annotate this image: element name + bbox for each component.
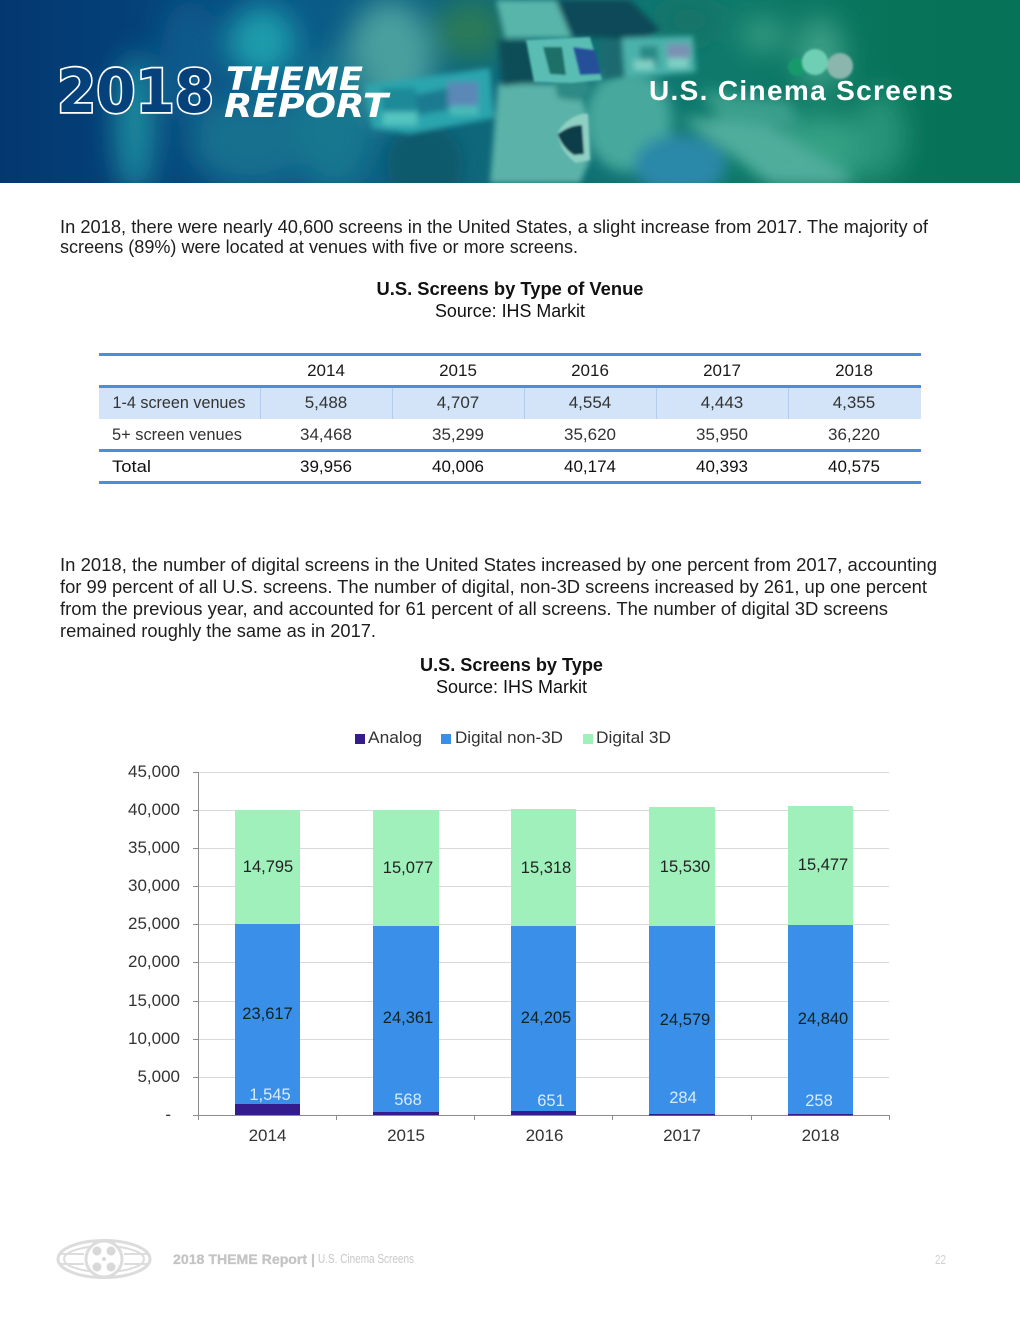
y axis: 20,000 <box>128 952 180 971</box>
hand <box>680 118 850 183</box>
bokeh lights <box>788 49 853 79</box>
bar 2015: 24,361 <box>383 1009 433 1027</box>
y axis: 5,000 <box>137 1067 180 1086</box>
y axis: 45,000 <box>128 762 180 781</box>
bar 2016: 15,318 <box>521 859 571 877</box>
bar 2018: 258 <box>805 1092 833 1110</box>
logo: 2018 THEME REPORT <box>57 57 391 127</box>
legend: Digital non-3D <box>455 728 563 747</box>
header row: 2014 <box>307 361 345 380</box>
banner title: U.S. Cinema Screens <box>649 75 953 106</box>
table heading: Source: IHS Markit <box>435 301 585 321</box>
y axis <box>128 762 180 1124</box>
hair <box>556 0 660 41</box>
chart heading <box>420 655 603 697</box>
x axis labels <box>249 1126 839 1145</box>
bar 2018 <box>788 806 853 1116</box>
y axis: 25,000 <box>128 914 180 933</box>
header row: 2016 <box>571 361 609 380</box>
bar 2016: 651 <box>537 1092 565 1110</box>
bar 2015: 568 <box>394 1091 422 1109</box>
bar 2018: 15,477 <box>798 856 848 874</box>
header banner <box>0 0 1020 183</box>
legend: Digital 3D <box>596 728 671 747</box>
row: 5+ screen venues <box>112 425 880 444</box>
intro paragraph <box>60 217 929 257</box>
foreground skin <box>496 0 572 38</box>
bar 2015: 15,077 <box>383 859 433 877</box>
x axis labels: 2015 <box>387 1126 425 1145</box>
row: 5+ screen venues: 34,468 <box>300 425 352 444</box>
bar 2017: 24,579 <box>660 1011 710 1029</box>
open mouth <box>558 114 590 163</box>
header row <box>307 361 873 380</box>
table heading: U.S. Screens by Type of Venue <box>376 279 644 299</box>
digital screens paragraph: for 99 percent of all U.S. screens. The number of digital, non-3D screens increased by 261, up one percent <box>60 577 927 597</box>
foreground face <box>526 37 602 163</box>
y axis: - <box>165 1105 171 1124</box>
intro paragraph: screens (89%) were located at venues with five or more screens. <box>60 237 578 257</box>
row: 1-4 screen venues <box>112 393 875 412</box>
logo: 2018 THEME REPORT: REPORT <box>224 86 391 125</box>
row: 1-4 screen venues: 5,488 <box>305 393 347 412</box>
y axis: 40,000 <box>128 800 180 819</box>
row: 5+ screen venues: 35,950 <box>696 425 748 444</box>
legend: Analog <box>368 728 422 747</box>
logo: 2018 THEME REPORT: THEME <box>226 60 363 98</box>
row: 5+ screen venues: 35,299 <box>432 425 484 444</box>
row: total: Total <box>112 457 151 476</box>
row: 5+ screen venues: 5+ screen venues <box>112 426 242 444</box>
bar 2015 <box>373 810 439 1115</box>
row: 1-4 screen venues: 4,707 <box>437 393 479 412</box>
row: 1-4 screen venues: 1-4 screen venues <box>112 394 246 412</box>
logo: 2018 THEME REPORT: 2018 <box>57 57 214 127</box>
stacked bar chart <box>128 728 890 1145</box>
row: total: 39,956 <box>300 457 352 476</box>
photo: blurred 3D glasses audience <box>115 0 906 207</box>
header row: 2015 <box>439 361 477 380</box>
row: total: 40,575 <box>828 457 880 476</box>
row: 5+ screen venues: 36,220 <box>828 425 880 444</box>
chart heading: Source: IHS Markit <box>436 677 587 697</box>
bar 2014 <box>235 810 300 1115</box>
row: 1-4 screen venues: 4,443 <box>701 393 743 412</box>
row: 5+ screen venues: 35,620 <box>564 425 616 444</box>
y axis: 10,000 <box>128 1029 180 1048</box>
x axis labels: 2014 <box>249 1126 286 1145</box>
second glasses <box>600 38 628 80</box>
row: total: 40,006 <box>432 457 484 476</box>
far glasses <box>365 68 494 134</box>
bar 2014: 14,795 <box>243 858 293 876</box>
table heading <box>376 279 644 321</box>
row: 1-4 screen venues: 4,554 <box>569 393 611 412</box>
header row: 2018 <box>835 361 873 380</box>
icon: film reel globe logo <box>58 1240 150 1278</box>
row: total: 40,393 <box>696 457 748 476</box>
y axis: 15,000 <box>128 991 180 1010</box>
y axis: 30,000 <box>128 876 180 895</box>
icon: 3D glasses, foreground <box>526 37 602 83</box>
intro paragraph: In 2018, there were nearly 40,600 screens in the United States, a slight increase from 2017. The majority of <box>60 217 929 237</box>
background blurred faces <box>115 0 906 195</box>
x axis labels: 2017 <box>663 1126 701 1145</box>
y axis: 35,000 <box>128 838 180 857</box>
x axis labels: 2016 <box>526 1126 563 1145</box>
footer label: 2018 THEME Report | <box>173 1251 315 1267</box>
bar 2016: 24,205 <box>521 1009 571 1027</box>
bar 2018: 24,840 <box>798 1010 848 1028</box>
bar 2017: 284 <box>669 1089 697 1107</box>
blue garment <box>634 135 726 195</box>
digital screens paragraph: from the previous year, and accounted for 61 percent of all screens. The number of digital 3D screens <box>60 599 888 619</box>
bar 2014: 1,545 <box>249 1086 291 1104</box>
second face <box>584 68 672 172</box>
chart heading: U.S. Screens by Type <box>420 655 603 675</box>
row: total <box>112 457 880 476</box>
footer: U.S. Cinema Screens <box>318 1251 414 1266</box>
row: total: 40,174 <box>564 457 616 476</box>
digital screens paragraph: In 2018, the number of digital screens in the United States increased by one percent from 2017, accounting <box>60 555 937 575</box>
x axis labels: 2018 <box>802 1126 839 1145</box>
bar 2016 <box>511 809 576 1115</box>
bar 2014: 23,617 <box>242 1005 293 1023</box>
bar 2017 <box>649 807 715 1116</box>
row: 1-4 screen venues: 4,355 <box>833 393 875 412</box>
page number: 22 <box>935 1252 946 1267</box>
digital screens paragraph <box>60 555 937 641</box>
footer <box>58 1240 946 1278</box>
header row: 2017 <box>703 361 741 380</box>
digital screens paragraph: remained roughly the same as in 2017. <box>60 621 376 641</box>
legend <box>355 728 671 747</box>
bar 2017: 15,530 <box>660 858 710 876</box>
table: screens by venue type <box>99 353 921 484</box>
highlighted row <box>99 387 921 419</box>
